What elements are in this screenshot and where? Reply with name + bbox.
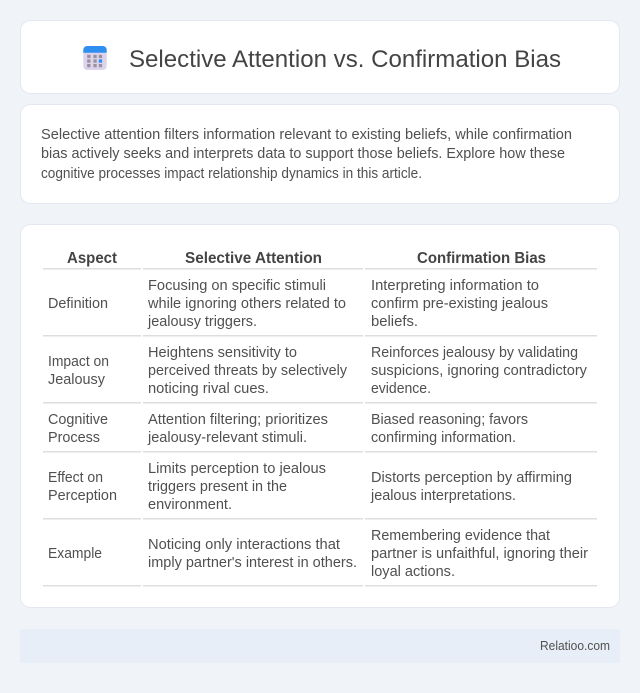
row: cognitive process: Cognitive bbox=[48, 412, 108, 428]
row: effect on perception: Perception bbox=[48, 488, 117, 504]
row: impact on jealousy: suspicions, ignoring contradictory bbox=[371, 363, 588, 379]
row: cognitive process: Attention filtering; prioritizes bbox=[148, 412, 328, 428]
row: impact on jealousy: Impact on bbox=[48, 354, 109, 370]
row: effect on perception: Limits perception to jealous bbox=[148, 461, 326, 477]
row: example bbox=[48, 528, 588, 580]
row: example: loyal actions. bbox=[371, 564, 455, 580]
row: effect on perception: Effect on bbox=[48, 470, 103, 486]
row: definition: jealousy triggers. bbox=[147, 314, 257, 330]
footer bar bbox=[20, 629, 620, 663]
row: cognitive process: Biased reasoning; favors bbox=[371, 412, 528, 428]
table header row bbox=[67, 250, 546, 267]
row: cognitive process: confirming information. bbox=[371, 430, 516, 446]
intro text: cognitive processes impact relationship dynamics in this article. bbox=[41, 166, 422, 182]
row: impact on jealousy: evidence. bbox=[371, 381, 431, 397]
row: definition: while ignoring others related to bbox=[147, 296, 346, 312]
row: impact on jealousy: Jealousy bbox=[48, 372, 106, 388]
row: definition: confirm pre-existing jealous bbox=[371, 296, 548, 312]
intro text: Selective attention filters information relevant to existing beliefs, while confirmation bbox=[41, 127, 572, 143]
panel: comparison table bbox=[20, 224, 620, 608]
table header row: Aspect bbox=[67, 250, 118, 267]
row: example: Example bbox=[48, 546, 102, 562]
panel: header bbox=[20, 20, 620, 94]
row: cognitive process: Process bbox=[48, 430, 100, 446]
intro text: bias actively seeks and interprets data to support those beliefs. Explore how these bbox=[41, 146, 565, 162]
panel: introduction bbox=[20, 104, 620, 204]
row: example: imply partner's interest in others. bbox=[148, 555, 357, 571]
row: definition: beliefs. bbox=[371, 314, 418, 330]
row: definition: Focusing on specific stimuli bbox=[148, 278, 326, 294]
row: example: Noticing only interactions that bbox=[148, 537, 340, 553]
footer credit: Relatioo.com bbox=[540, 639, 610, 653]
row: cognitive process bbox=[48, 412, 528, 446]
row: cognitive process: jealousy-relevant stimuli. bbox=[147, 430, 307, 446]
row: impact on jealousy: noticing rival cues. bbox=[148, 381, 269, 397]
row: definition bbox=[48, 278, 548, 330]
row: impact on jealousy: Heightens sensitivity to bbox=[148, 345, 297, 361]
row: definition: Interpreting information to bbox=[371, 278, 539, 294]
row: effect on perception: jealous interpretations. bbox=[370, 488, 516, 504]
title: Selective Attention vs. Confirmation Bias bbox=[129, 46, 561, 73]
table header row: Confirmation Bias bbox=[417, 250, 546, 267]
table header row: Selective Attention bbox=[185, 250, 322, 267]
row: impact on jealousy: Reinforces jealousy by validating bbox=[371, 345, 578, 361]
row: example: Remembering evidence that bbox=[371, 528, 550, 544]
row: effect on perception: Distorts perception by affirming bbox=[371, 470, 572, 486]
row: impact on jealousy: perceived threats by selectively bbox=[148, 363, 348, 379]
row: example: partner is unfaithful, ignoring their bbox=[371, 546, 588, 562]
row: effect on perception bbox=[48, 461, 572, 513]
intro text bbox=[41, 127, 572, 182]
row: effect on perception: triggers present in the bbox=[148, 479, 287, 495]
row: definition: Definition bbox=[48, 296, 108, 312]
row: impact on jealousy bbox=[48, 345, 588, 397]
icon: calendar bbox=[83, 46, 107, 70]
row: effect on perception: environment. bbox=[148, 497, 232, 513]
